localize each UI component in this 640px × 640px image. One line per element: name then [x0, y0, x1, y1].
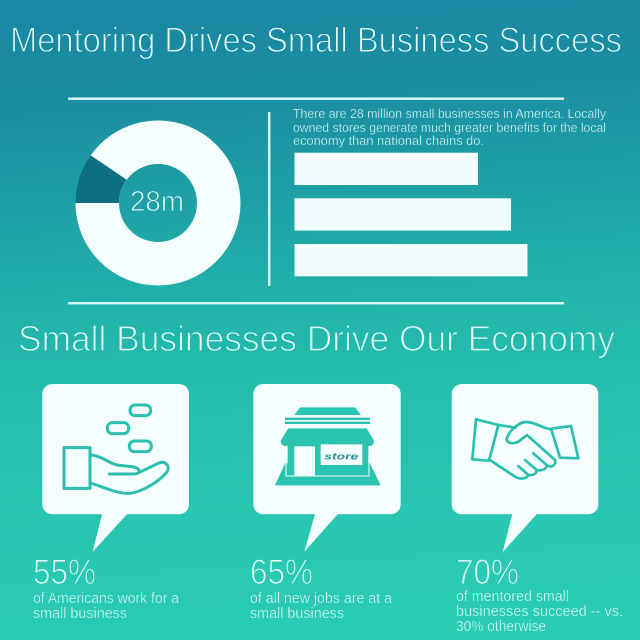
intro text block: There are 28 million small businesses in America. Locally — [293, 106, 606, 121]
stat: 70%: businesses succeed -- vs. — [456, 604, 623, 620]
intro text block: economy than national chains do. — [293, 133, 484, 148]
stat: 55% — [33, 553, 180, 622]
donut highlighted wedge — [75, 155, 127, 203]
donut chart: 28m — [75, 142, 219, 264]
panel: 65% card — [253, 384, 401, 552]
intro text block: owned stores generate much greater benefits for the local — [293, 120, 606, 135]
icon: hand with coins — [64, 405, 168, 493]
stat: 65% — [250, 553, 393, 622]
speech bubble — [253, 384, 401, 552]
stat: 70% — [456, 553, 623, 635]
stat: 55%: small business — [33, 606, 127, 622]
stat: 65%: 65% — [250, 553, 313, 592]
stat: 55%: of Americans work for a — [33, 591, 180, 607]
icon: handshake — [472, 419, 578, 479]
stat: 55%: 55% — [33, 553, 96, 592]
section heading: Small Businesses Drive Our Economy — [18, 318, 616, 359]
stat: 65%: small business — [250, 606, 344, 622]
stat: 70%: 30% otherwise — [456, 619, 546, 635]
donut centre label: 28m — [130, 186, 184, 218]
store sign: store — [324, 452, 358, 462]
speech bubble — [42, 384, 189, 552]
stat: 70%: of mentored small — [456, 589, 569, 605]
stat: 65%: of all new jobs are at a — [250, 591, 393, 607]
stat: 70%: 70% — [456, 553, 519, 592]
panel: 55% card — [42, 384, 189, 552]
speech bubble — [452, 384, 598, 552]
intro text block — [293, 106, 606, 148]
bar chart — [294, 153, 528, 276]
icon: store — [275, 407, 381, 485]
panel: 70% card — [452, 384, 598, 552]
